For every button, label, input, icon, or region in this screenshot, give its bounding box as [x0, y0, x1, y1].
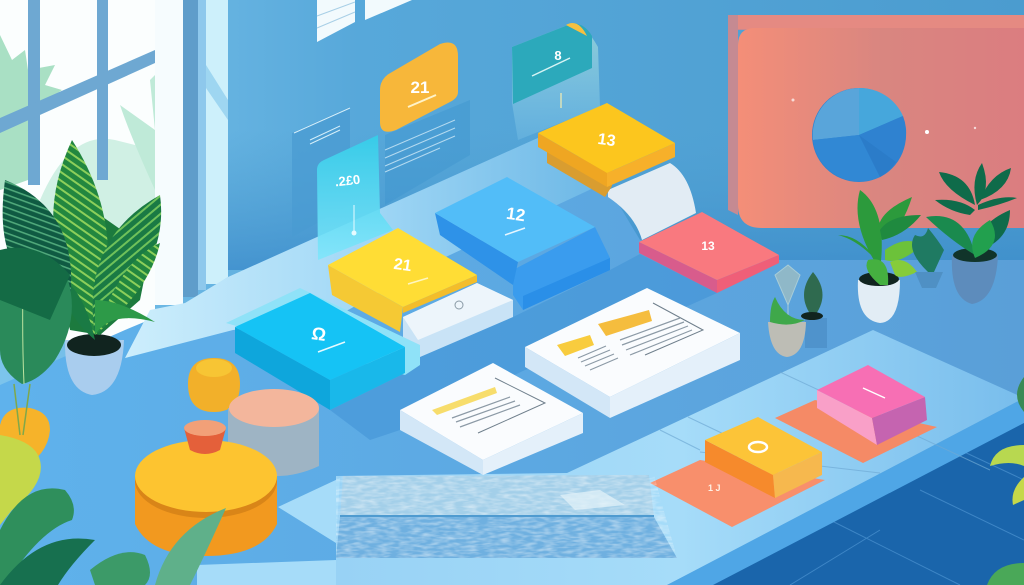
card: cyan: Ω: [310, 323, 327, 345]
window: [0, 0, 228, 340]
card: yellow top: 13: [597, 131, 617, 150]
window mullions: [0, 0, 155, 185]
stool: grey: [228, 389, 319, 476]
card: pink: 13: [701, 239, 715, 253]
white slab by yellow card: [403, 283, 513, 357]
stool: small yellow: [188, 358, 240, 412]
card: cyan: [235, 293, 405, 410]
pie chart: [812, 88, 906, 182]
floating panel: cyan glass: [317, 135, 393, 260]
plant: left big leaf with yellow pot: [0, 248, 72, 470]
plant: right dark in grey pot: [926, 163, 1017, 304]
floor: [667, 405, 1024, 585]
plant: foreground leaves: [0, 435, 226, 585]
plant: right edge: [987, 377, 1024, 585]
wall board: [728, 15, 1024, 228]
upper wall window: [317, 0, 412, 42]
plant: small back: [912, 228, 944, 288]
background foliage: [0, 35, 155, 260]
rug: [336, 475, 677, 558]
document: small: [400, 363, 583, 475]
plant: small pots: [768, 265, 827, 357]
card: yellow mid: [328, 228, 477, 332]
desk surface: [0, 137, 1024, 585]
cyan card back strip: [226, 288, 420, 375]
front desk panel: [197, 330, 1024, 585]
document: large: [525, 288, 740, 418]
desk front edge: [667, 398, 1024, 585]
floating panel: yellow 21: [380, 42, 458, 132]
plant: left dark fern: [3, 180, 71, 300]
floating panel: cyan glass: .2£0: [334, 172, 361, 189]
card: pink: [639, 212, 779, 293]
plant: left palm in blue pot: [53, 140, 161, 395]
back shelf: [125, 137, 600, 358]
paper ribbon: [608, 163, 696, 240]
card: orange mat with yellow block: 1 J: [708, 483, 721, 493]
card: orange mat with yellow block: [650, 417, 825, 527]
floating panel: back left: [292, 107, 350, 237]
floating panel: yellow 21: 21: [411, 78, 429, 97]
card: blue: 12: [505, 204, 526, 225]
floating panel: teal: [512, 23, 600, 140]
card: blue: [435, 177, 610, 310]
orange pot with lid: [135, 420, 277, 556]
plant: right large in white pot: [838, 190, 922, 323]
card: pink stack: [775, 365, 937, 463]
card shadow band: [330, 254, 717, 440]
floating panel: text block: [385, 100, 470, 205]
floating panel: teal: 8: [554, 48, 562, 63]
card: yellow top: [538, 103, 675, 197]
card: yellow mid: 21: [393, 256, 413, 275]
